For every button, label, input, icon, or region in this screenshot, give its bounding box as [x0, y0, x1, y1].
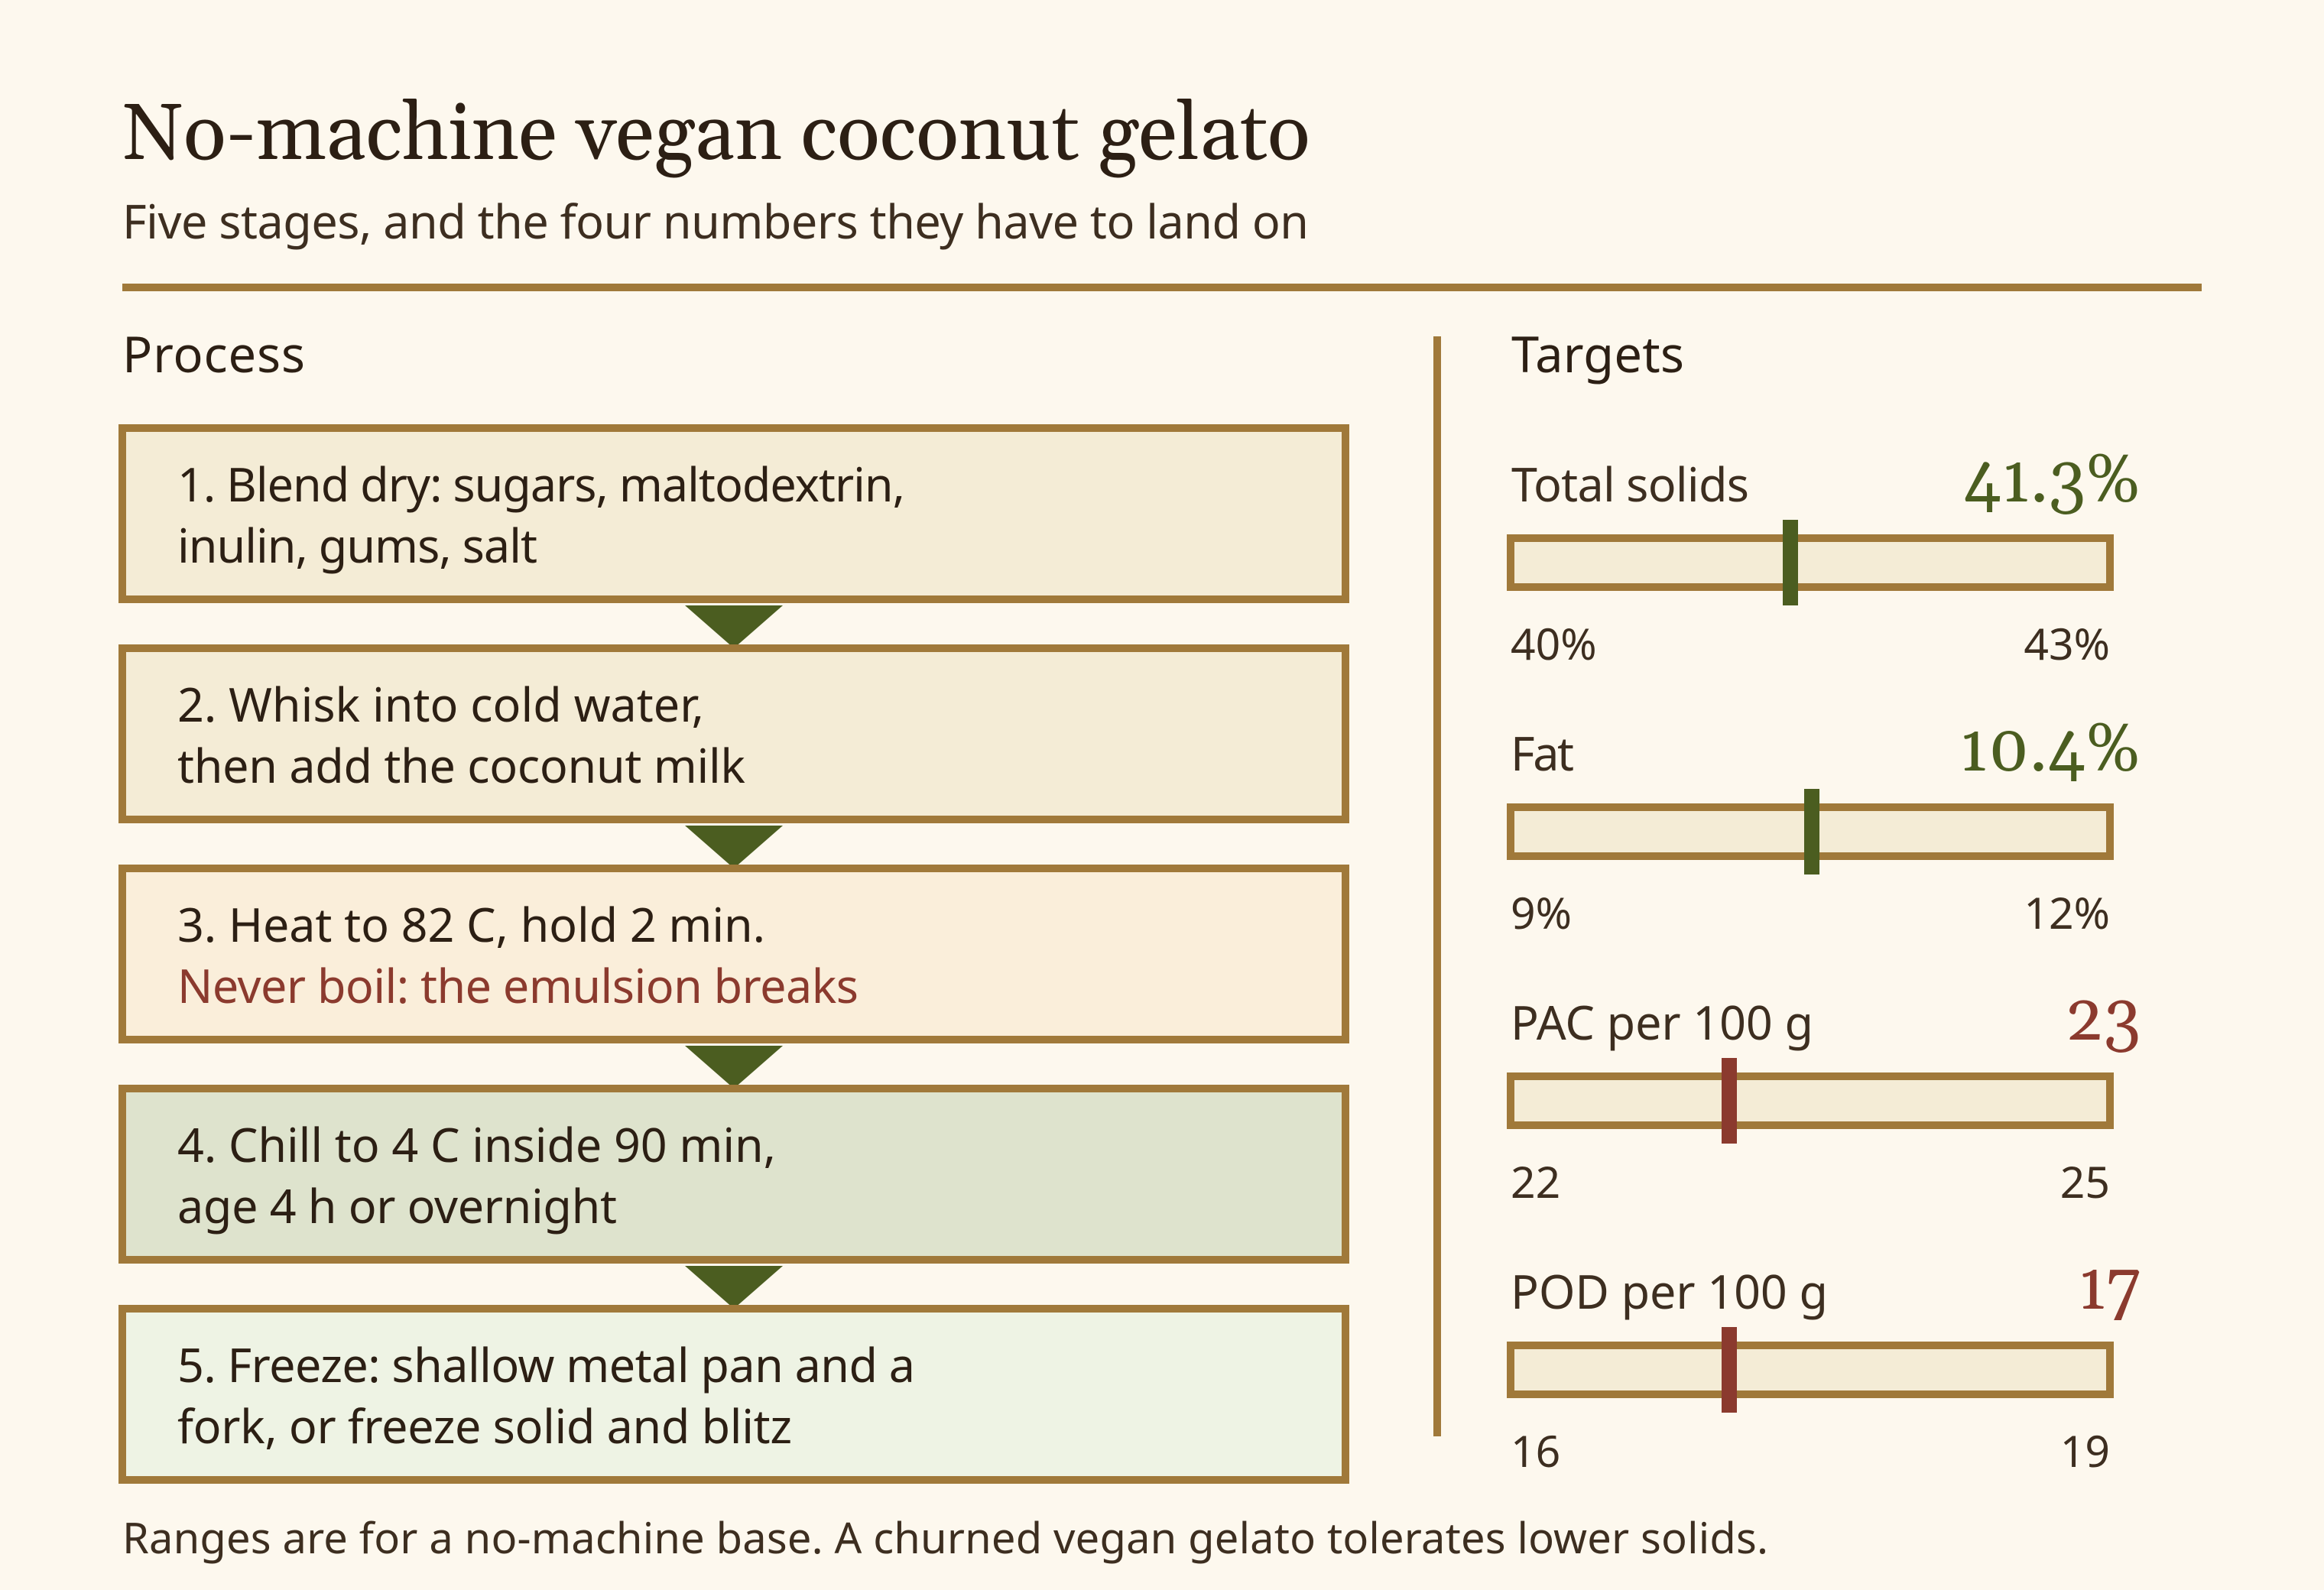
gauge: PAC: 25	[2060, 1151, 2110, 1211]
gauge: PAC: 23	[2066, 978, 2141, 1063]
step 3 box: 3. Heat to 82 C, hold 2 min.	[177, 892, 765, 956]
arrow 3 to 4	[685, 1046, 783, 1089]
step 3 box: Never boil: the emulsion breaks	[177, 953, 859, 1017]
arrow 1 to 2	[685, 605, 783, 648]
gauge: total solids	[1511, 440, 2141, 673]
gauge: total solids: 43%	[2024, 613, 2110, 673]
footnote: Ranges are for a no-machine base. A churned vegan gelato tolerates lower solids.	[122, 1508, 1768, 1566]
step 5 box	[122, 1309, 1345, 1480]
gauge: POD: POD per 100 g	[1511, 1259, 1828, 1322]
title: No-machine vegan coconut gelato	[122, 86, 1310, 187]
step 2 box: 2. Whisk into cold water,	[177, 672, 704, 735]
step 1 box	[122, 428, 1345, 599]
gauge: fat: 9%	[1511, 882, 1572, 942]
subtitle: Five stages, and the four numbers they have to land on	[122, 189, 1309, 252]
gauge: POD: 17	[2078, 1247, 2141, 1332]
gauge: total solids: 41.3%	[1963, 440, 2141, 525]
step 2 box	[122, 648, 1345, 819]
heading: targets: Targets	[1511, 320, 1684, 388]
gauge: POD: 16	[1511, 1420, 1560, 1480]
step 4 box: age 4 h or overnight	[177, 1173, 617, 1237]
step 1 box: inulin, gums, salt	[177, 513, 537, 576]
step 1 box: 1. Blend dry: sugars, maltodextrin,	[177, 452, 905, 515]
step 5 box: fork, or freeze solid and blitz	[177, 1394, 792, 1457]
gauge: POD: 19	[2060, 1420, 2110, 1480]
arrow 4 to 5	[685, 1266, 783, 1309]
gauge: total solids: 40%	[1511, 613, 1597, 673]
step 3 box	[122, 868, 1345, 1040]
gauge: fat: Fat	[1511, 721, 1574, 784]
gauge: PAC: PAC per 100 g	[1511, 990, 1813, 1053]
step 4 box	[122, 1089, 1345, 1260]
panel: process	[122, 320, 1345, 1480]
panel: targets	[1511, 320, 2141, 1480]
arrow 2 to 3	[685, 826, 783, 868]
gauge: fat: 12%	[2024, 882, 2110, 942]
gauge: fat: 10.4%	[1959, 709, 2141, 794]
gauge: PAC	[1511, 978, 2141, 1211]
step 5 box: 5. Freeze: shallow metal pan and a	[177, 1332, 915, 1396]
gauge: fat	[1511, 709, 2141, 942]
gauge: POD	[1511, 1247, 2141, 1480]
heading: process: Process	[122, 320, 305, 388]
step 4 box: 4. Chill to 4 C inside 90 min,	[177, 1112, 776, 1176]
gauge: PAC: 22	[1511, 1151, 1560, 1211]
step 2 box: then add the coconut milk	[177, 733, 745, 797]
gauge: total solids: Total solids	[1511, 452, 1749, 515]
